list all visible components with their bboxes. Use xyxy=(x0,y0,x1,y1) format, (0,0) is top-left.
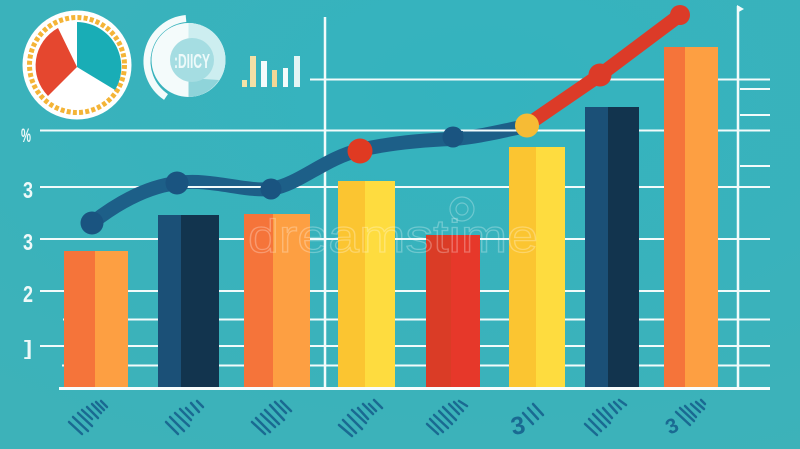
watermark xyxy=(248,197,538,262)
y-axis labels xyxy=(21,126,33,360)
grid lines xyxy=(40,6,770,388)
x-axis label 8: 3 xyxy=(662,414,682,439)
x-axis baseline xyxy=(59,387,770,390)
x-axis label 1 xyxy=(69,401,107,434)
x-axis label 6: 3 xyxy=(508,411,528,441)
x-axis label 6 xyxy=(508,404,543,441)
bar 7: navy xyxy=(585,107,639,388)
bar 4: yellow xyxy=(338,181,395,388)
pie slice: teal xyxy=(77,22,121,90)
x-axis label 8 xyxy=(662,400,705,439)
watermark: dreamstime xyxy=(248,210,538,262)
white guide lines over the blue line xyxy=(185,130,520,187)
bar 5: red xyxy=(426,235,480,388)
x-axis label 2 xyxy=(166,401,203,434)
y-axis labels: ] xyxy=(24,338,32,360)
x-axis label 7 xyxy=(585,400,626,435)
y-axis labels: 3 xyxy=(23,229,33,255)
y-axis labels: % xyxy=(21,126,31,147)
bar 8: orange xyxy=(664,47,718,388)
trend line: blue segment xyxy=(92,126,527,223)
arrowhead: right axis xyxy=(737,5,744,13)
gauge label: :DIICY xyxy=(174,51,210,73)
white inner disc xyxy=(33,21,121,109)
x-axis label 3 xyxy=(252,401,291,434)
trend line markers xyxy=(80,5,690,234)
x-axis label 4 xyxy=(339,400,382,436)
pie slice: red xyxy=(36,28,77,96)
bar 2: navy xyxy=(158,215,219,388)
circular gauge icon xyxy=(147,18,226,97)
bar 3: orange xyxy=(244,214,310,388)
bar 6: yellow xyxy=(509,147,565,388)
mini bar chart icon xyxy=(242,56,300,87)
y-axis labels: 3 xyxy=(23,177,33,203)
y-axis labels: 2 xyxy=(23,281,33,307)
pie chart icon xyxy=(22,10,132,120)
trend line: red segment xyxy=(527,15,680,125)
bar 1: orange xyxy=(64,251,128,388)
x-axis label 5 xyxy=(427,401,467,434)
